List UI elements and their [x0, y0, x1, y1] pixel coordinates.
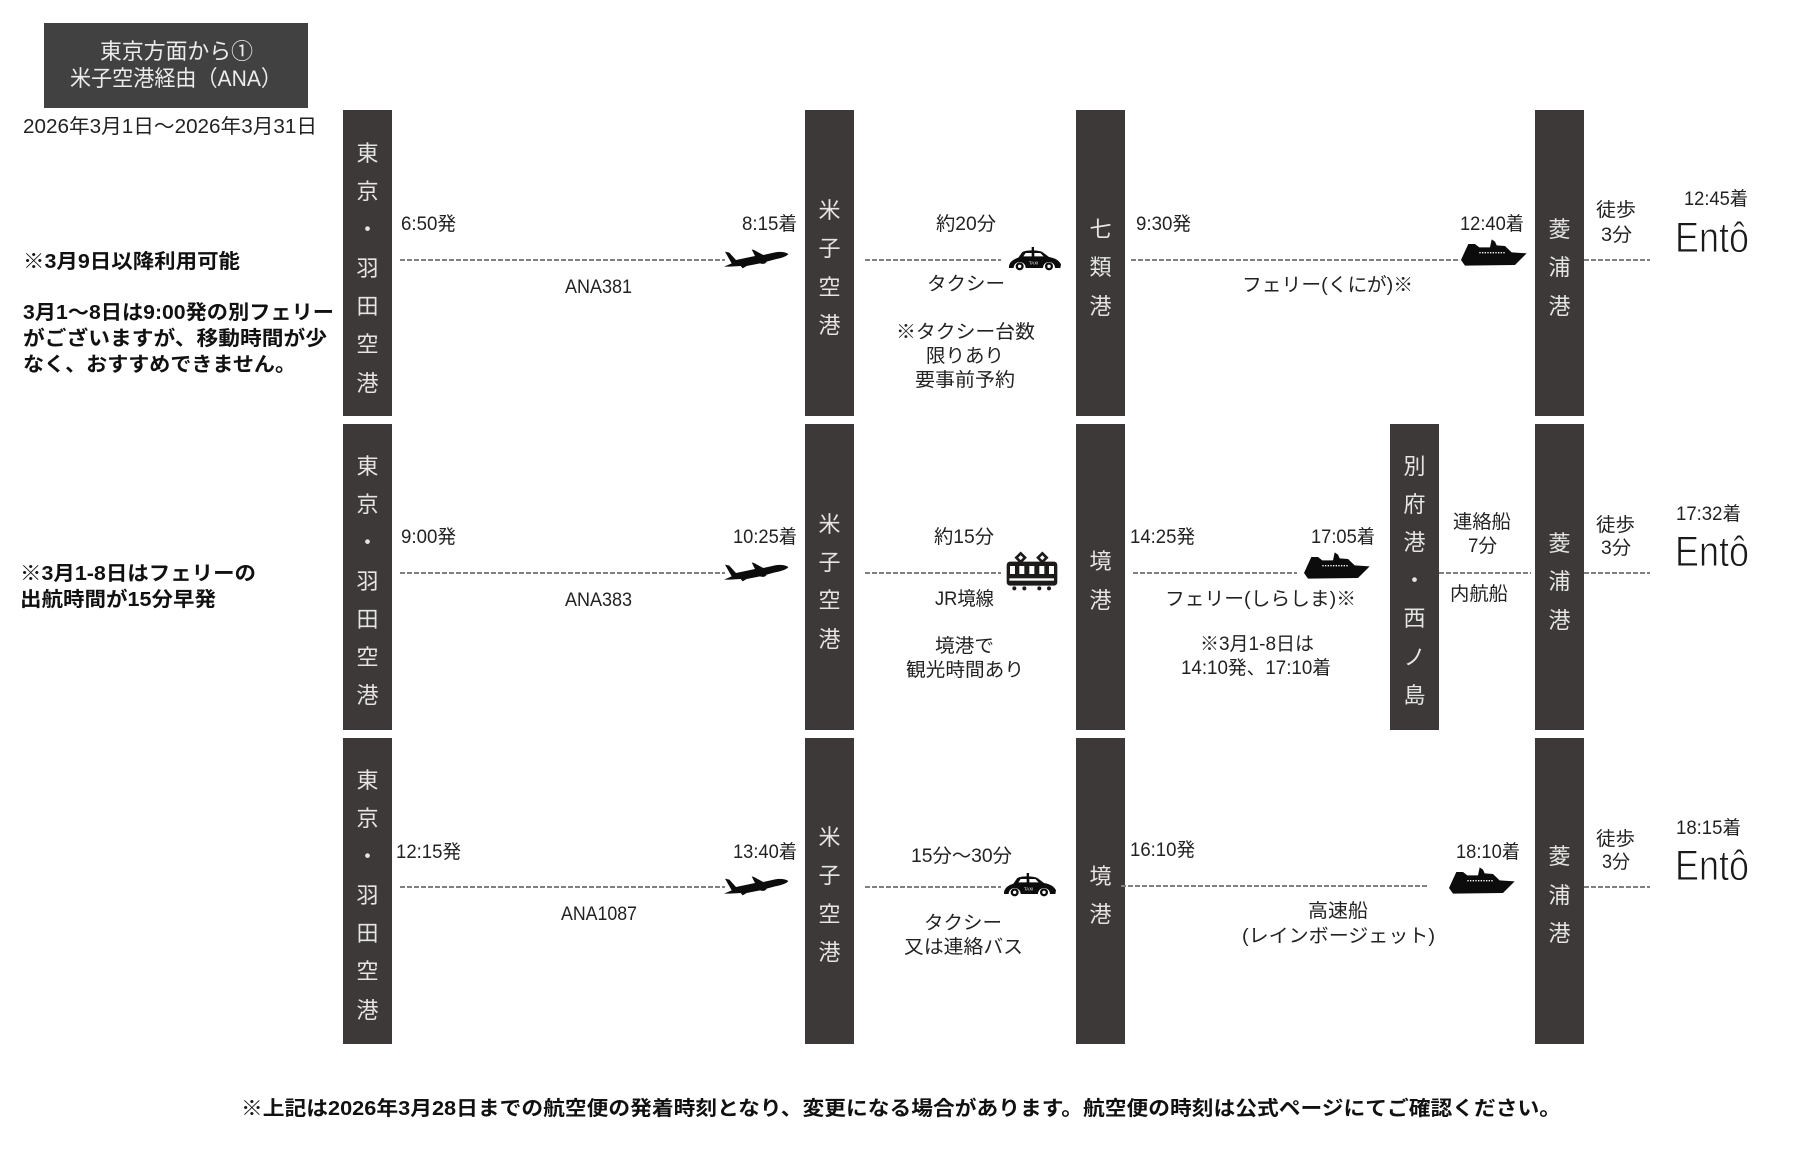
title: route heading [44, 23, 308, 108]
arrow: high speed boat line [1121, 885, 1427, 887]
station: 米子空港: 空 [818, 275, 841, 300]
station: 菱浦港: 港 [1548, 294, 1571, 319]
station: 東京・羽田空港: ・ [356, 217, 379, 242]
arrow: walk line [1584, 886, 1650, 888]
departure time: 16:10発 [1130, 839, 1195, 861]
note: row 1 availability: 3月1～8日は9:00発の別フェリー [23, 301, 334, 324]
date range: 2026年3月1日～2026年3月31日 [23, 115, 317, 138]
station: 東京・羽田空港: 羽 [356, 256, 379, 281]
note: row 2 ferry departure: ※3月1-8日はフェリーの [20, 563, 256, 585]
taxi note [896, 321, 1035, 391]
station: 米子空港: 米 [818, 512, 841, 537]
station: 菱浦港: 菱 [1548, 531, 1571, 556]
walk time [1596, 514, 1635, 559]
walk time: 3分 [1601, 537, 1631, 559]
ferry date note: ※3月1-8日は [1200, 634, 1314, 655]
station: 別府港・西ノ島 [1390, 424, 1439, 730]
station: 米子空港 [805, 738, 854, 1044]
taxi note: 限りあり [926, 345, 1004, 367]
arrow: flight line [400, 259, 725, 261]
station: 別府港・西ノ島: 西 [1403, 606, 1426, 631]
station: 菱浦港: 浦 [1548, 255, 1571, 280]
walk time: 徒歩 [1596, 828, 1635, 850]
station: 境港: 港 [1089, 588, 1112, 613]
station: 七類港: 類 [1089, 255, 1112, 280]
arrow: walk line [1584, 572, 1650, 574]
station: 菱浦港: 菱 [1548, 844, 1571, 869]
walk time: 徒歩 [1596, 199, 1636, 221]
station: 東京・羽田空港: 港 [356, 683, 379, 708]
station: 境港 [1076, 424, 1125, 730]
transport label: タクシー [924, 912, 1002, 934]
transport label [904, 912, 1023, 958]
station: 米子空港: 子 [818, 550, 841, 575]
station: 東京・羽田空港: 田 [356, 607, 379, 632]
walk time [1596, 199, 1636, 246]
ferry name: フェリー(くにが)※ [1242, 274, 1413, 296]
boat name: 高速船 [1308, 900, 1368, 922]
flight number: ANA381 [565, 277, 632, 298]
arrow: taxi line [865, 886, 1001, 888]
arrival time: 17:05着 [1311, 526, 1375, 548]
footnote: ※上記は2026年3月28日までの航空便の発着時刻となり、変更になる場合があります。航空便の時刻は公式ページにてご確認ください。 [241, 1096, 1561, 1120]
station: 菱浦港: 菱 [1548, 217, 1571, 242]
station: 別府港・西ノ島: 府 [1403, 492, 1426, 517]
icon: ferry [1304, 552, 1370, 579]
station: 境港: 港 [1089, 902, 1112, 927]
taxi or bus duration: 15分～30分 [911, 845, 1012, 867]
station: 七類港 [1076, 110, 1125, 416]
station: 米子空港: 港 [818, 313, 841, 338]
arrival time: 13:40着 [733, 841, 797, 863]
icon: train [1007, 553, 1057, 590]
station: 菱浦港 [1535, 424, 1584, 730]
station: 別府港・西ノ島: ノ [1403, 645, 1426, 670]
station: 別府港・西ノ島: 別 [1403, 454, 1426, 479]
icon: taxi: TAXI [1029, 260, 1038, 265]
station: 東京・羽田空港 [343, 424, 392, 730]
note: row 2 ferry departure: 出航時間が15分早発 [20, 587, 216, 611]
note: row 1 availability: なく、おすすめできません。 [23, 353, 296, 376]
ferry date note [1181, 634, 1331, 679]
station: 米子空港: 米 [818, 198, 841, 223]
logo: Entô: Entô [1675, 528, 1749, 576]
flight number: ANA383 [565, 590, 632, 611]
ferry name: フェリー(しらしま)※ [1165, 589, 1356, 610]
sightseeing note: 観光時間あり [906, 659, 1024, 681]
station: 東京・羽田空港: 田 [356, 921, 379, 946]
departure time: 14:25発 [1130, 526, 1195, 548]
arrow: walk line [1584, 259, 1650, 261]
departure time: 9:30発 [1136, 213, 1191, 235]
station: 菱浦港: 浦 [1548, 569, 1571, 594]
station: 東京・羽田空港: ・ [356, 844, 379, 869]
connecting boat time [1453, 511, 1511, 557]
title: route heading: 米子空港経由（ANA） [70, 66, 282, 91]
station: 境港 [1076, 738, 1125, 1044]
note: row 1 availability [23, 250, 334, 376]
station: 東京・羽田空港 [343, 110, 392, 416]
station: 東京・羽田空港: 京 [356, 492, 379, 517]
station: 米子空港: 空 [818, 588, 841, 613]
station: 菱浦港: 港 [1548, 608, 1571, 633]
station: 菱浦港 [1535, 110, 1584, 416]
walk time: 3分 [1601, 224, 1632, 246]
walk time: 徒歩 [1596, 514, 1635, 536]
departure time: 12:15発 [396, 841, 461, 863]
station: 東京・羽田空港: 京 [356, 179, 379, 204]
station: 東京・羽田空港: 港 [356, 998, 379, 1023]
arrow: ferry line [1133, 572, 1297, 574]
icon: plane [724, 562, 788, 581]
arrow: taxi line [865, 259, 1001, 261]
boat name: (レインボージェット) [1242, 925, 1435, 947]
station: 米子空港: 子 [818, 236, 841, 261]
station: 別府港・西ノ島: 港 [1403, 530, 1426, 555]
icon: taxi [1009, 247, 1061, 270]
station: 米子空港 [805, 424, 854, 730]
station: 別府港・西ノ島: ・ [1403, 568, 1426, 593]
icon: ferry [1461, 239, 1527, 266]
sightseeing note: 境港で [935, 635, 994, 657]
icon: taxi [1004, 873, 1056, 896]
station: 東京・羽田空港: 東 [356, 768, 379, 793]
train duration: 約15分 [934, 526, 994, 548]
connecting boat time: 連絡船 [1453, 511, 1511, 533]
station: 別府港・西ノ島: 島 [1403, 683, 1426, 708]
title: route heading: 東京方面から① [100, 39, 253, 64]
station: 米子空港: 子 [818, 863, 841, 888]
arrow: flight line [400, 572, 725, 574]
station: 東京・羽田空港: 田 [356, 294, 379, 319]
station: 東京・羽田空港: 東 [356, 141, 379, 166]
panel: route row 2 [343, 424, 1749, 730]
logo: Entô: Entô [1675, 214, 1749, 262]
sightseeing note [906, 635, 1024, 681]
station: 東京・羽田空港: 空 [356, 959, 379, 984]
icon: taxi: TAXI [1024, 886, 1033, 891]
boat name [1242, 900, 1435, 947]
departure time: 9:00発 [401, 526, 456, 548]
station: 菱浦港: 港 [1548, 921, 1571, 946]
transport label: 又は連絡バス [904, 936, 1023, 958]
arrow: flight line [400, 886, 725, 888]
departure time: 6:50発 [401, 213, 456, 235]
station: 境港: 境 [1089, 864, 1112, 889]
taxi note: ※タクシー台数 [896, 321, 1035, 343]
walk time: 3分 [1602, 851, 1630, 873]
logo: Entô: Entô [1675, 842, 1749, 890]
icon: plane [724, 249, 788, 268]
taxi note: 要事前予約 [915, 369, 1015, 391]
station: 東京・羽田空港: 空 [356, 645, 379, 670]
icon: plane [724, 876, 788, 895]
icon: high speed boat [1449, 867, 1515, 894]
flight number: ANA1087 [561, 904, 637, 925]
connecting boat time: 7分 [1468, 535, 1497, 557]
taxi duration: 約20分 [936, 213, 996, 235]
station: 東京・羽田空港: 羽 [356, 883, 379, 908]
station: 七類港: 七 [1089, 217, 1112, 242]
arrival at Entô: 12:45着 [1684, 188, 1748, 210]
walk time [1596, 828, 1635, 873]
panel: route row 3 [343, 738, 1749, 1044]
station: 東京・羽田空港: 港 [356, 371, 379, 396]
station: 菱浦港: 浦 [1548, 883, 1571, 908]
arrival at Entô: 18:15着 [1676, 817, 1741, 839]
note: row 1 availability: がございますが、移動時間が少 [23, 326, 327, 350]
arrival at Entô: 17:32着 [1676, 503, 1741, 525]
station: 東京・羽田空港: 空 [356, 332, 379, 357]
station: 米子空港 [805, 110, 854, 416]
station: 東京・羽田空港: 東 [356, 454, 379, 479]
arrival time: 8:15着 [742, 213, 797, 235]
station: 菱浦港 [1535, 738, 1584, 1044]
arrival time: 18:10着 [1456, 841, 1520, 863]
station: 米子空港: 空 [818, 902, 841, 927]
arrow: ferry line [1131, 259, 1459, 261]
station: 七類港: 港 [1089, 294, 1112, 319]
station: 東京・羽田空港: 京 [356, 806, 379, 831]
boat type: 内航船 [1450, 583, 1508, 605]
transport label: タクシー [927, 273, 1005, 295]
panel: route row 1 [343, 110, 1749, 416]
station: 東京・羽田空港: 羽 [356, 569, 379, 594]
station: 米子空港: 米 [818, 825, 841, 850]
transport label: JR境線 [935, 588, 994, 610]
station: 東京・羽田空港 [343, 738, 392, 1044]
station: 東京・羽田空港: ・ [356, 530, 379, 555]
arrow: train line [865, 572, 1001, 574]
note: row 1 availability: ※3月9日以降利用可能 [23, 250, 240, 273]
station: 境港: 境 [1089, 549, 1112, 574]
ferry date note: 14:10発、17:10着 [1181, 657, 1331, 679]
arrival time: 12:40着 [1460, 213, 1524, 235]
arrow: connecting boat line [1439, 572, 1531, 574]
note: row 2 ferry departure [20, 563, 256, 611]
station: 米子空港: 港 [818, 940, 841, 965]
station: 米子空港: 港 [818, 627, 841, 652]
arrival time: 10:25着 [733, 526, 797, 548]
